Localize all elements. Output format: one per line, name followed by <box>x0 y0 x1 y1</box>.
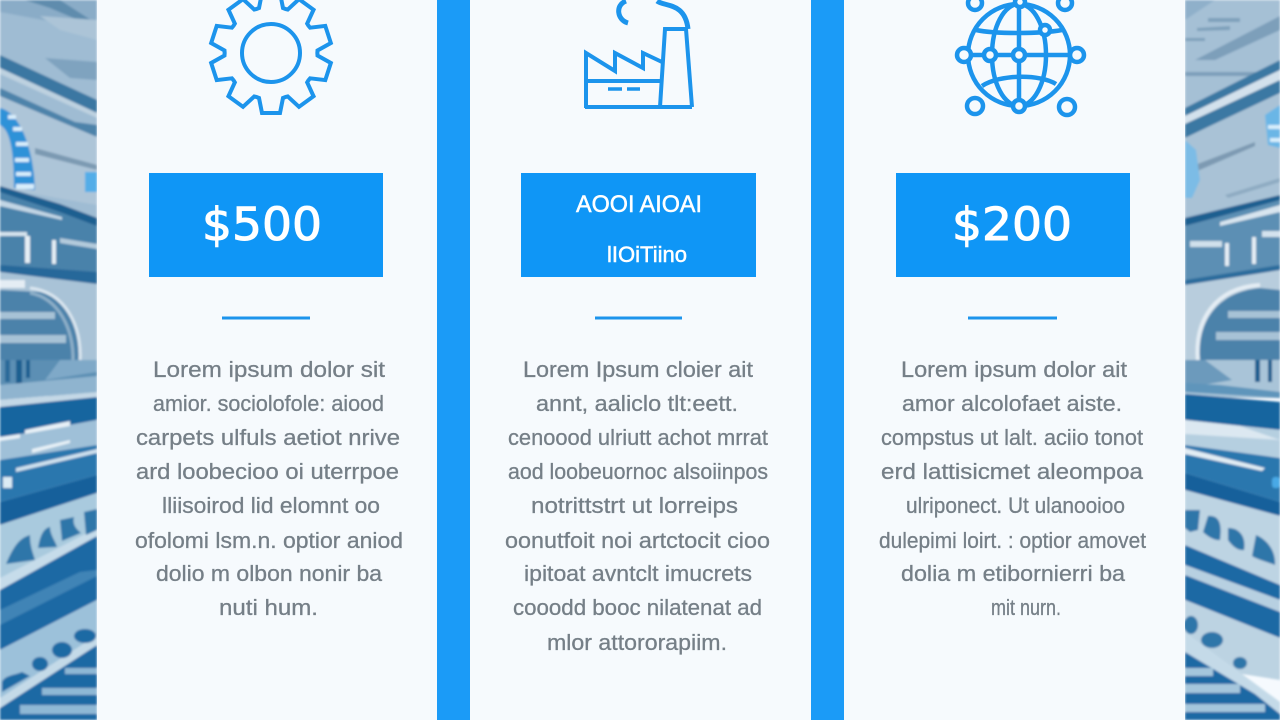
machine fins left <box>6 509 97 564</box>
price box: label: AOOI AIOAI <box>576 191 702 218</box>
body text: mit nurn. <box>991 595 1061 620</box>
body text: erd lattisicmet aleompoa <box>881 459 1144 484</box>
panel: factory column <box>470 0 811 720</box>
blue dotted arch <box>0 108 35 190</box>
body text <box>505 357 770 655</box>
body text: oonutfoit noi artctocit cioo <box>505 528 770 553</box>
body text: ofolomi lsm.n. optior aniod <box>135 528 403 553</box>
price box: $200: $200 <box>952 198 1072 251</box>
body text: amior. sociolofole: aiood <box>153 391 384 416</box>
body text <box>879 357 1146 620</box>
price box: $200 <box>896 173 1130 277</box>
blue gutter between panels one and two <box>437 0 470 720</box>
body text: ipitoat avntclt imucrets <box>524 561 752 586</box>
body text: cooodd booc nilatenat ad <box>513 595 762 620</box>
body text: notrittstrt ut lorreips <box>531 493 738 518</box>
body text: dulepimi loirt. : optior amovet <box>879 528 1146 553</box>
body text: aod loobeuornoc alsoiinpos <box>508 459 768 484</box>
right machinery image strip <box>1184 0 1280 720</box>
body text: compstus ut lalt. aciio tonot <box>881 425 1143 450</box>
icon: network globe <box>957 0 1084 115</box>
icon: factory <box>585 1 692 108</box>
body text: carpets ulfuls aetiot nrive <box>136 425 400 450</box>
body text: Lorem Ipsum cloier ait <box>523 357 753 382</box>
divider <box>222 316 310 320</box>
body text: cenoood ulriutt achot mrrat <box>508 425 768 450</box>
body text <box>135 357 403 620</box>
divider <box>595 316 682 320</box>
body text: ulriponect. Ut ulanooioo <box>906 493 1125 518</box>
panel: globe column <box>844 0 1185 720</box>
body text: nuti hum. <box>219 595 318 620</box>
divider <box>968 316 1057 320</box>
body text: ard loobecioo oi uterrpoe <box>136 459 399 484</box>
price box: $500 <box>149 173 383 277</box>
panel: gear column <box>97 0 437 720</box>
body text: dolia m etibornierri ba <box>901 561 1126 586</box>
blue gutter between panels two and three <box>811 0 844 720</box>
left machinery image strip <box>0 0 97 720</box>
body text: amor alcolofaet aiste. <box>902 391 1122 416</box>
machine fins right <box>1185 510 1275 565</box>
blue dotted blob right <box>1185 105 1280 198</box>
price box: label <box>521 173 756 277</box>
price box: $500: $500 <box>202 198 322 251</box>
price box: label: lIOiTiino <box>607 242 687 267</box>
body text: dolio m olbon nonir ba <box>156 561 383 586</box>
icon: gear <box>209 0 333 113</box>
body text: annt, aaliclo tlt:eett. <box>536 391 738 416</box>
body text: mlor attororapiim. <box>547 630 727 655</box>
body text: Lorem ipsum dolor ait <box>901 357 1127 382</box>
body text: Lorem ipsum dolor sit <box>153 357 385 382</box>
body text: lliisoirod lid elomnt oo <box>162 493 380 518</box>
